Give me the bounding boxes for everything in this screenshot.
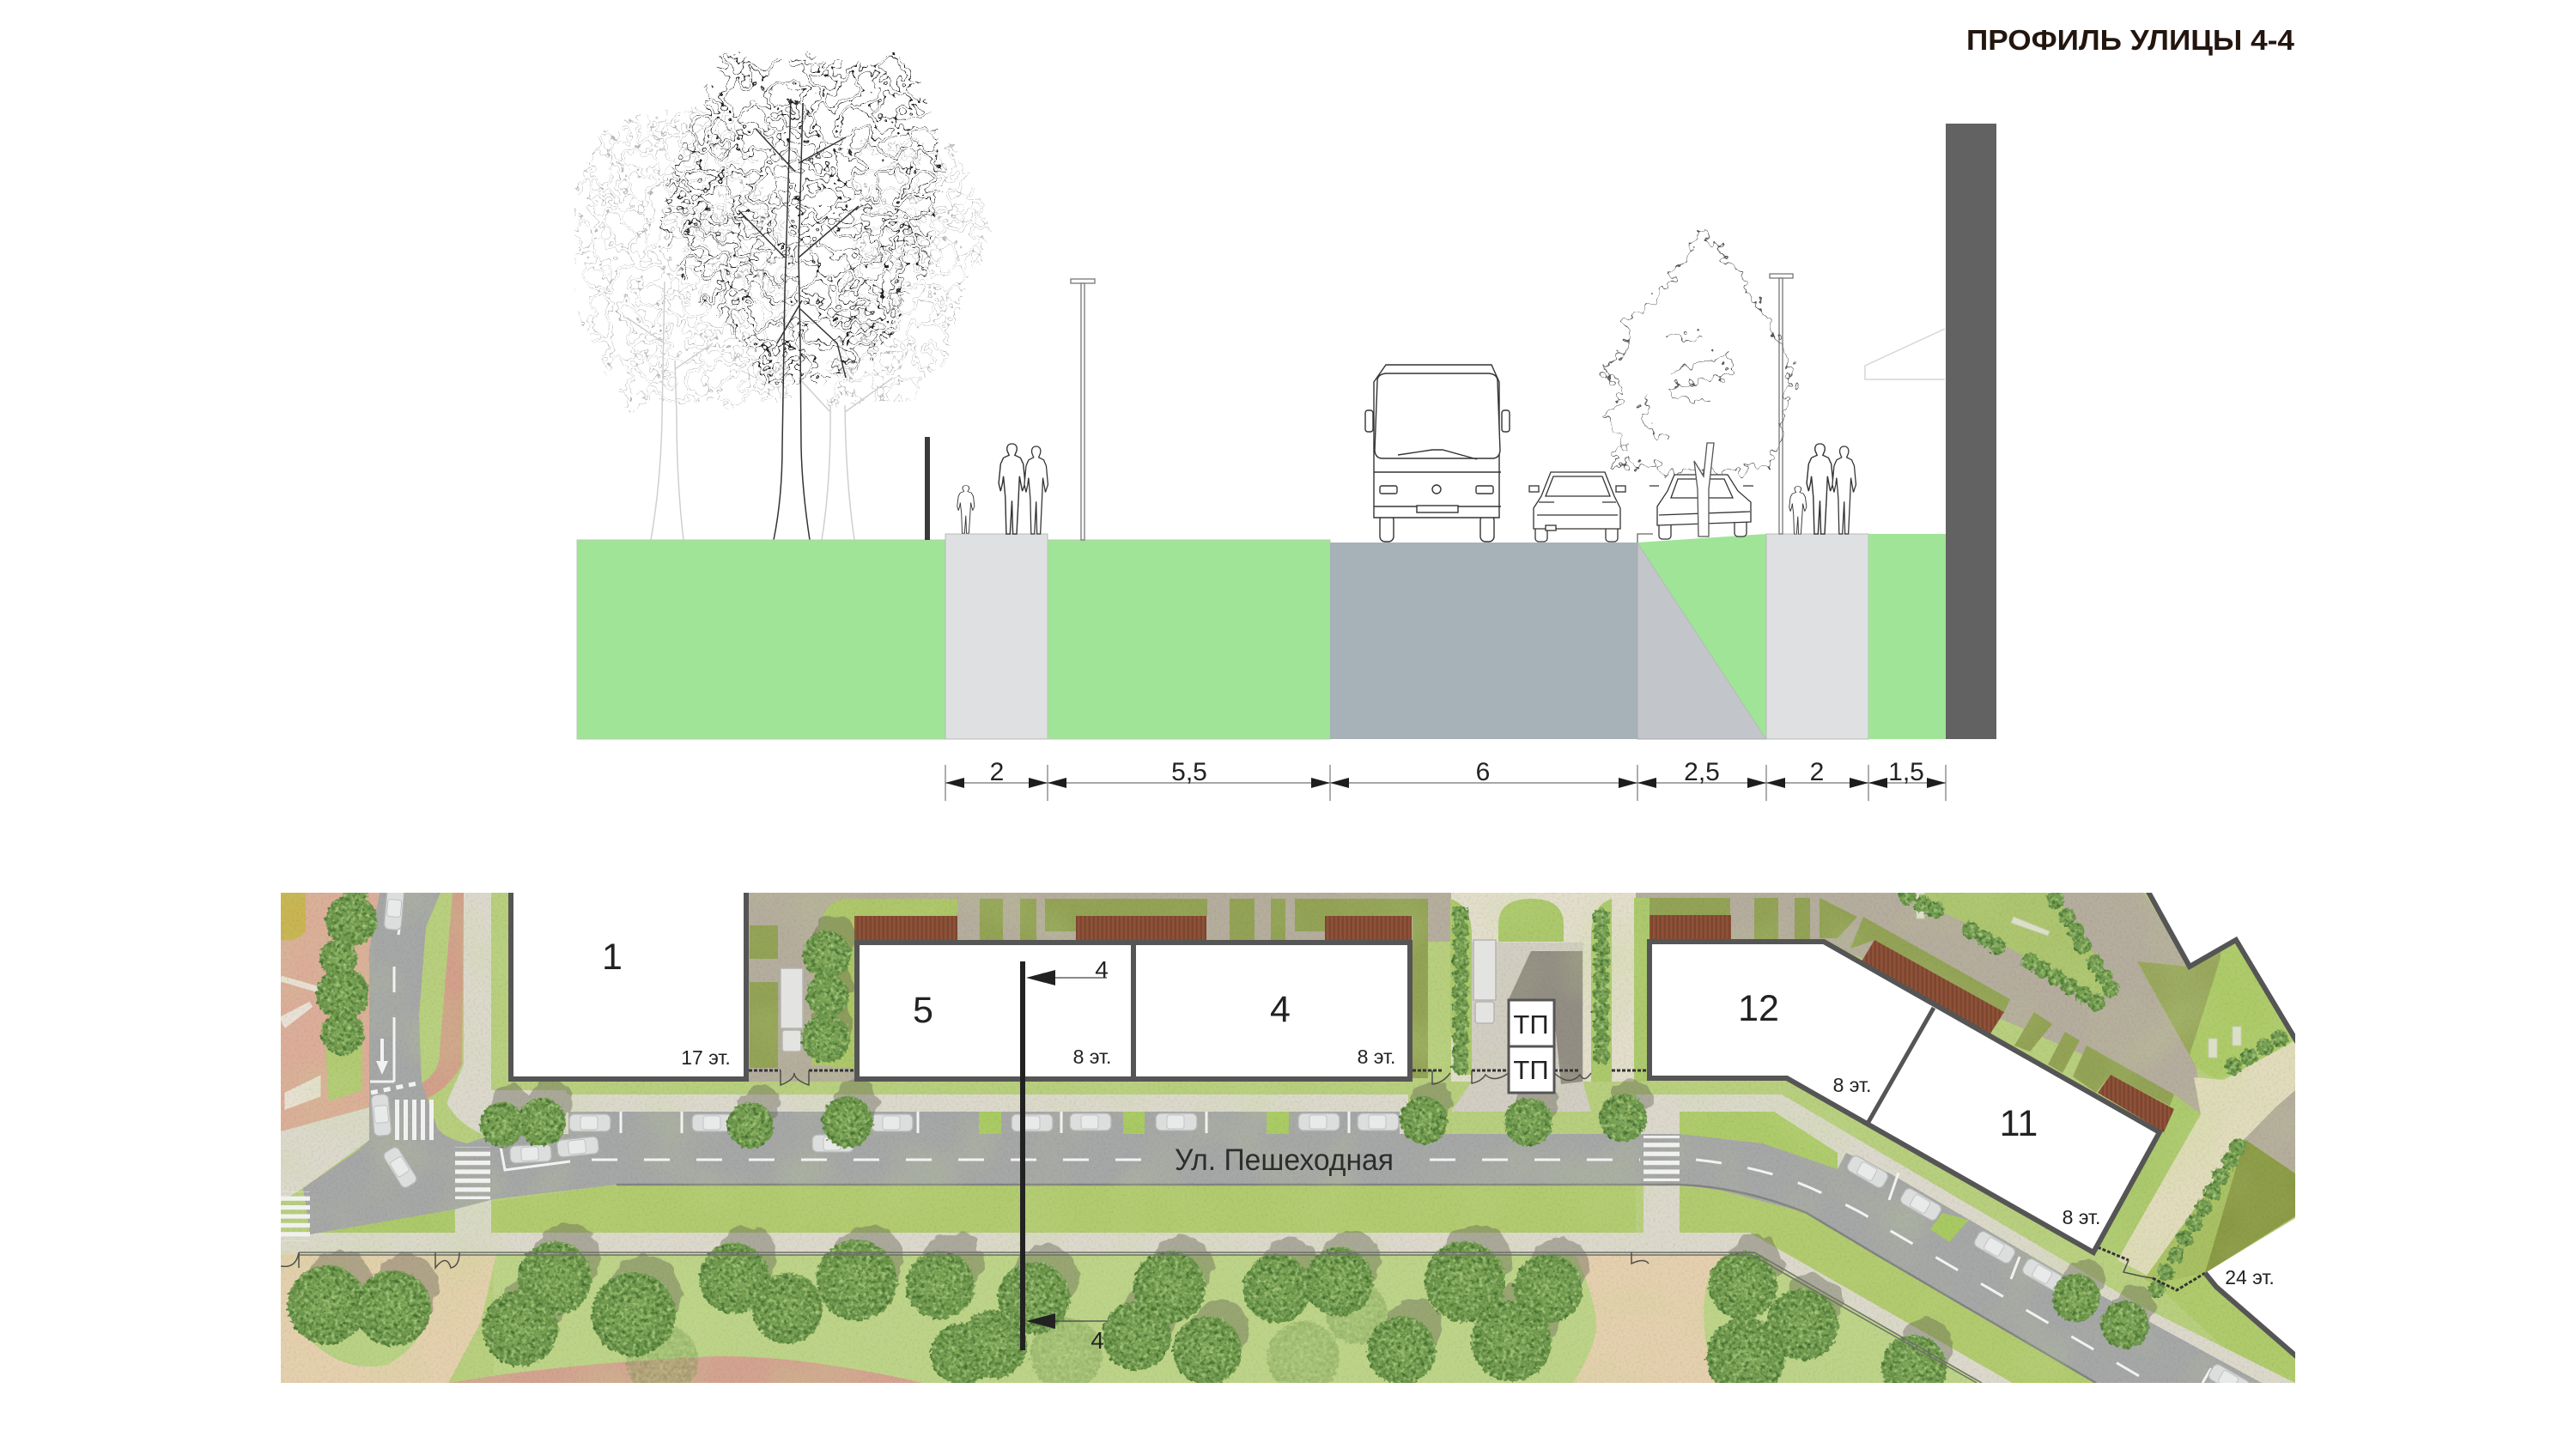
plan labels: 8 эт. [1358, 1046, 1395, 1068]
building north-east [2144, 884, 2301, 1049]
brick path park [450, 1356, 923, 1383]
faded young trees [626, 1282, 1388, 1397]
top section marker [1026, 956, 1109, 985]
dimension line [945, 765, 1946, 801]
panel: street cross-section 4-4 [577, 59, 1996, 801]
south lawn [491, 1185, 1636, 1233]
buildings 12 and 11 [1649, 942, 2160, 1252]
north-east lawn shade [2137, 951, 2221, 1068]
awning [1865, 329, 1945, 379]
building 24 wall [2205, 1273, 2301, 1361]
cars [371, 888, 2251, 1398]
paving curve east [1636, 1094, 2295, 1383]
street lamp right [1770, 274, 1793, 534]
tree shadows [305, 915, 2154, 1373]
beige diagonal path [2117, 1040, 2295, 1278]
south-east lawn [2144, 1139, 2295, 1291]
texture overlays [281, 893, 2295, 1383]
parked car right [1649, 475, 1753, 539]
section cut line [1020, 961, 1025, 1350]
bottom section marker [1026, 1313, 1107, 1354]
ground: lawn right [1868, 534, 1946, 739]
top section marker: 4 [1095, 956, 1109, 983]
young tree outline [1602, 232, 1793, 472]
panel: site plan [281, 882, 2301, 1400]
green strips and arch [1450, 898, 2201, 1257]
plan labels: 8 эт. [1073, 1046, 1111, 1068]
lawn strip east [1680, 1112, 1838, 1169]
plan labels: 11 [2000, 1103, 2038, 1144]
fences and gates [281, 1070, 2205, 1383]
taupe corner [2245, 1090, 2295, 1173]
ground: lawn centre [1048, 540, 1330, 739]
green courtyard patches [750, 898, 2174, 1107]
centre line curve [1696, 1160, 2141, 1377]
dimension labels: 2 [990, 758, 1004, 786]
cross path [455, 1185, 491, 1236]
title: ПРОФИЛЬ УЛИЦЫ 4-4 [1966, 24, 2295, 56]
pedestrians right [1789, 444, 1856, 534]
lawn south-east of building 24 [2155, 1273, 2295, 1383]
plan labels: 12 [1738, 988, 1779, 1029]
road network [303, 893, 2262, 1383]
west paving [281, 1107, 369, 1202]
street lamp left [1071, 279, 1095, 540]
fence post [925, 437, 930, 540]
dimension ticks [945, 765, 1946, 801]
south lawn west [310, 1210, 455, 1234]
bus [1365, 365, 1510, 542]
central garden [1894, 893, 2117, 999]
dimension labels: 2,5 [1684, 758, 1720, 786]
north strip paving [567, 1094, 1408, 1134]
building 1 [511, 884, 746, 1079]
street name: Ул. Пешеходная [1175, 1143, 1394, 1177]
plan labels: ТП [1513, 1009, 1549, 1040]
south paving band [281, 1233, 2013, 1383]
courtyard fences [749, 1070, 2205, 1290]
bottom section marker: 4 [1091, 1327, 1104, 1354]
shrub rows [1452, 888, 2288, 1298]
plan labels: ТП [1513, 1055, 1549, 1085]
curb [1637, 534, 1653, 543]
plaza shadow [1509, 951, 1583, 1084]
parking bays [568, 1112, 1400, 1135]
sand west [281, 1254, 496, 1383]
garden benches [1917, 893, 2241, 1058]
young tree trunk [1694, 443, 1714, 537]
west lawn wedge [325, 1045, 362, 1101]
road markings [370, 909, 2211, 1383]
main tree [661, 59, 945, 540]
plan labels: 8 эт. [2063, 1206, 2100, 1228]
ground: sidewalk right [1766, 534, 1868, 739]
west benches [281, 979, 319, 1106]
parking bay lines [621, 1112, 2211, 1383]
plan labels: 24 эт. [2225, 1266, 2275, 1288]
building 24 floors [2205, 1215, 2301, 1361]
trucks [781, 940, 1496, 1052]
brick square west [281, 893, 380, 1131]
brick path [422, 893, 464, 1099]
park lawn [494, 1254, 1982, 1383]
west road and junction [303, 893, 2262, 1383]
ground: parking wedge [1637, 543, 1766, 739]
ground: roadway [1330, 543, 1637, 739]
light lawn between buildings 1 and 5 [811, 899, 957, 1069]
plan base lawn [281, 893, 2295, 1383]
buildings 5 and 4 [857, 943, 1410, 1079]
faint background trees [577, 112, 990, 540]
trees: park and street [288, 882, 2149, 1400]
plan labels: 5 [913, 990, 933, 1031]
ground: lawn wedge [1637, 534, 1766, 739]
plan labels: 8 эт. [1833, 1074, 1871, 1096]
south-east lawn strip [1680, 1186, 2096, 1383]
plaza grey [1451, 943, 1591, 1112]
ground: lawn left [577, 540, 945, 739]
infographic canvas [281, 29, 2295, 1383]
sand east [1573, 1254, 1754, 1383]
plan labels [602, 937, 2275, 1288]
pedestrians left [957, 444, 1048, 534]
beige passage top [1451, 893, 1636, 1082]
yellow shrub [281, 893, 306, 941]
parking islands [979, 1112, 1969, 1242]
dimension arrows [945, 778, 1946, 788]
dimension labels [990, 758, 1924, 786]
dimension labels: 2 [1810, 758, 1824, 786]
section line 4-4 [1020, 956, 1109, 1354]
dimension labels: 5,5 [1171, 758, 1207, 786]
dimension labels: 1,5 [1888, 758, 1924, 786]
road arrow [376, 1039, 388, 1075]
south-east lawn shade [2205, 1139, 2295, 1273]
transformer substations [1509, 1000, 1554, 1093]
road edge [617, 1185, 2096, 1383]
centre line main road [592, 1159, 1640, 1161]
west road lines [370, 909, 570, 1170]
south fence [299, 1252, 1982, 1383]
courtyard taupe [749, 893, 2201, 1114]
paving west corner [447, 893, 567, 1142]
plan labels: 1 [602, 937, 623, 978]
dimension axis [945, 782, 1946, 784]
wooden decks [854, 915, 2174, 1132]
north-east lawn [2137, 940, 2295, 1080]
ground: sidewalk left [945, 534, 1048, 739]
south gates [281, 1252, 1649, 1268]
building wall [1946, 124, 1996, 739]
zebra crossings [281, 1083, 1680, 1241]
lawn ellipse in sand [309, 1305, 425, 1367]
car centre [1529, 472, 1625, 542]
cross path east [1643, 1181, 1680, 1234]
dimension labels: 6 [1476, 758, 1490, 786]
plan labels: 4 [1270, 989, 1291, 1030]
plan labels: 17 эт. [681, 1046, 731, 1069]
courtyard gates [781, 1070, 2153, 1278]
